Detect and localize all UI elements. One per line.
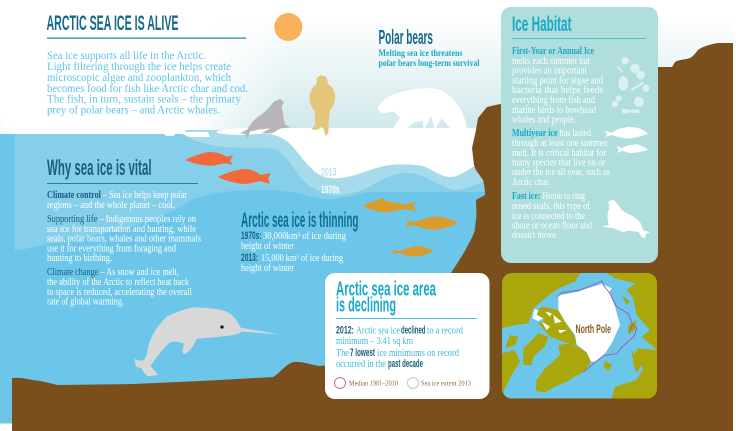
declining text [336, 324, 463, 370]
why sea ice is vital text: hunting to birthing. [47, 253, 112, 264]
ice habitat text: through at least one summer [512, 138, 609, 149]
ice habitat text: doesn't move. [512, 230, 558, 241]
declining text: past decade [388, 358, 423, 370]
intro paragraph [47, 50, 248, 116]
why sea ice is vital text: sea ice for transportation and hunting, while [47, 224, 196, 235]
intro paragraph: prey of polar bears – and Arctic whales. [47, 104, 220, 116]
intro paragraph: Sea ice supports all life in the Arctic. [47, 50, 206, 62]
declining text: occurred in the [336, 359, 386, 370]
declining text: ice minimums on record [377, 348, 459, 359]
ocean [0, 134, 736, 431]
icon: narwhal [134, 307, 280, 376]
why sea ice is vital text: seals, polar bears, whales and other mammals [47, 234, 201, 244]
ice habitat text: Fast ice: Home to ring [512, 191, 585, 202]
icon: cod 3 [391, 246, 433, 257]
why sea ice is vital text: regions – and the whole planet – cool. [47, 200, 175, 211]
icon: polar bear [377, 88, 467, 130]
intro paragraph: microscopic algae and zooplankton, which [47, 72, 231, 84]
ice habitat text [512, 46, 610, 241]
map: arctic archipelago [533, 307, 577, 345]
icon: plankton [612, 57, 650, 114]
declining text: 2012: [336, 324, 354, 336]
why sea ice is vital text: Supporting life – Indigenous peoples rely on [47, 214, 196, 225]
declining text: Arctic sea ice [356, 326, 400, 336]
icon: white fish 2 [616, 144, 648, 153]
declining heading: is declining [336, 294, 396, 316]
thinning text: 2013: [241, 252, 258, 264]
declining heading: Arctic sea ice area [336, 278, 436, 300]
ice habitat text: melts each summer but [512, 56, 590, 67]
intro paragraph: becomes food for fish like Arctic char and cod. [47, 83, 248, 95]
ice habitat text: Multiyear ice has lasted [512, 128, 591, 139]
polar bears text: Melting sea ice threatens [378, 49, 463, 59]
ice habitat text: Arctic char. [512, 177, 550, 188]
sky background [0, 0, 736, 136]
why sea ice is vital text: use it for everything from foraging and [47, 244, 176, 254]
panel: ice habitat [501, 7, 658, 263]
icon: seal on ice [240, 99, 291, 139]
legend: sea ice extent: Sea ice extent 2013 [421, 378, 471, 388]
sea ice [163, 128, 490, 178]
map label: north pole: North Pole [576, 322, 611, 336]
map: median ice line [558, 281, 637, 372]
ice habitat text: many species that live on or [512, 158, 606, 168]
ice habitat text: everything from fish and [512, 95, 595, 106]
ice habitat heading: Ice Habitat [512, 13, 572, 36]
map: other landmasses [505, 295, 657, 398]
main title: ARCTIC SEA ICE IS ALIVE [46, 12, 178, 35]
map: ocean [502, 272, 657, 398]
ice habitat text: shore or ocean floor and [512, 220, 592, 232]
ocean layer: mid water [15, 134, 490, 251]
polar bears text: polar bears long-term survival [378, 59, 480, 69]
map: greenland [536, 343, 591, 392]
label: 1970s: 1970s [321, 184, 340, 196]
ice habitat text: marine birds to bowhead [512, 105, 596, 116]
ice habitat text: ice is connected to the [512, 211, 585, 222]
ice habitat text: under the ice all year, such as [512, 167, 610, 178]
icon: white seal [602, 199, 650, 239]
legend: sea ice extent [408, 378, 471, 388]
ice habitat text: provides an important [512, 66, 587, 76]
ice habitat text: nosed seals, this type of [512, 201, 591, 212]
icon: cod 1 [363, 198, 416, 212]
icon: cod 2 [405, 216, 458, 230]
icon: salmon 1 [185, 152, 233, 166]
declining text: 7 lowest [350, 347, 375, 359]
ice habitat text: whales and people. [512, 114, 576, 126]
declining text: The [336, 348, 349, 359]
panel: north pole map [502, 272, 657, 399]
panel: sea ice area declining [325, 273, 490, 399]
polar bears heading: Polar bears [378, 27, 433, 49]
legend: median [334, 378, 398, 388]
icon: person in parka [310, 75, 335, 136]
intro paragraph: The fish, in turn, sustain seals – the primary [47, 94, 241, 106]
declining text: minimum – 3.41 sq km [336, 336, 413, 347]
polar bears text [378, 49, 480, 69]
intro paragraph: Light filtering through the ice helps create [47, 61, 231, 73]
text: Arctic sea ice is thinning [241, 209, 358, 232]
ice habitat text: starting point for algae and [512, 76, 603, 86]
thinning text: 15,000 km³ of ice during [261, 253, 343, 264]
icon: white fish 1 [604, 127, 648, 138]
declining heading [336, 278, 436, 316]
thinning text: height of winter [241, 263, 295, 274]
why sea ice is vital text: Climate change – As snow and ice melt, [47, 267, 179, 278]
ice habitat text: First-Year or Annual Ice [512, 46, 594, 57]
icon: salmon 2 [218, 169, 271, 184]
label: 2013: 2013 [321, 166, 336, 178]
declining text: declined [401, 324, 426, 336]
why sea ice is vital text: Climate control – Sea ice helps keep polar [47, 190, 188, 201]
thinning text: height of winter [241, 241, 295, 252]
why sea ice is vital text: rate of global warming. [47, 296, 124, 308]
why sea ice is vital heading: Why sea ice is vital [47, 155, 152, 180]
ice habitat text: bacteria that helps feeds [512, 85, 603, 96]
why sea ice is vital text: the ability of the Arctic to reflect heat back [47, 277, 189, 288]
thinning text: 30,000km³ of ice during [263, 231, 346, 242]
map: sea ice [532, 284, 620, 362]
ocean layer: 1970s ice extent [185, 130, 490, 195]
ice habitat text: melt. It is critical habitat for [512, 148, 607, 159]
thinning text [241, 230, 346, 274]
why sea ice is vital text [47, 190, 201, 308]
declining text: to a record [427, 326, 463, 336]
thinning text: 1970s: [241, 230, 262, 242]
why sea ice is vital text: to space is reduced, accelerating the overall [47, 287, 192, 298]
icon: sun [274, 13, 302, 41]
legend: median: Median 1981–2010 [349, 378, 398, 388]
